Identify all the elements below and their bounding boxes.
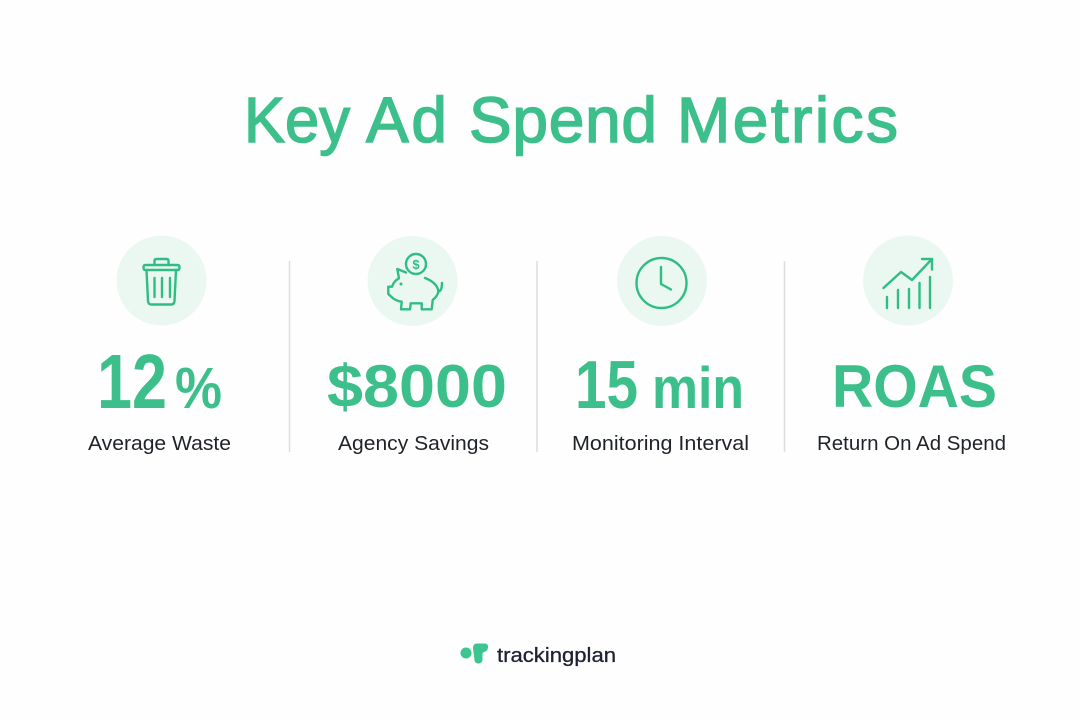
metric label: Average Waste: [88, 433, 231, 455]
title: Spend: [469, 84, 657, 156]
icon: piggy bank with coin: [368, 236, 458, 326]
icon: clock: [617, 236, 707, 326]
title: Metrics: [677, 84, 898, 156]
panel: agency savings: [327, 236, 507, 455]
icon: piggy bank with coin: $: [412, 257, 420, 272]
title: Ad: [366, 84, 447, 156]
metric label: Return On Ad Spend: [817, 433, 1006, 455]
logo: trackingplan: [460, 644, 616, 667]
metric value: 15 min: [575, 347, 744, 423]
metric value: 12%: 12: [97, 339, 167, 425]
wordmark: trackingplan: [497, 645, 616, 667]
metric value: ROAS: ROAS: [832, 353, 997, 420]
panel: monitoring interval: [572, 236, 749, 455]
icon: trash can: [116, 236, 206, 326]
icon: growth chart: [863, 236, 953, 326]
metric label: Agency Savings: [338, 433, 489, 455]
metric value: 15 min: 15: [575, 347, 638, 423]
metric value: 12%: %: [175, 356, 222, 421]
title: Key: [244, 84, 350, 156]
metric value: $8000: $8000: [327, 353, 507, 420]
icon: logo mark: [460, 644, 488, 664]
panel: average waste: [88, 236, 231, 455]
metric value: 15 min: min: [652, 356, 744, 421]
metric value: 12%: [97, 339, 222, 425]
metric label: Monitoring Interval: [572, 433, 749, 455]
title: [244, 84, 898, 156]
panel: return on ad spend: [817, 236, 1006, 455]
